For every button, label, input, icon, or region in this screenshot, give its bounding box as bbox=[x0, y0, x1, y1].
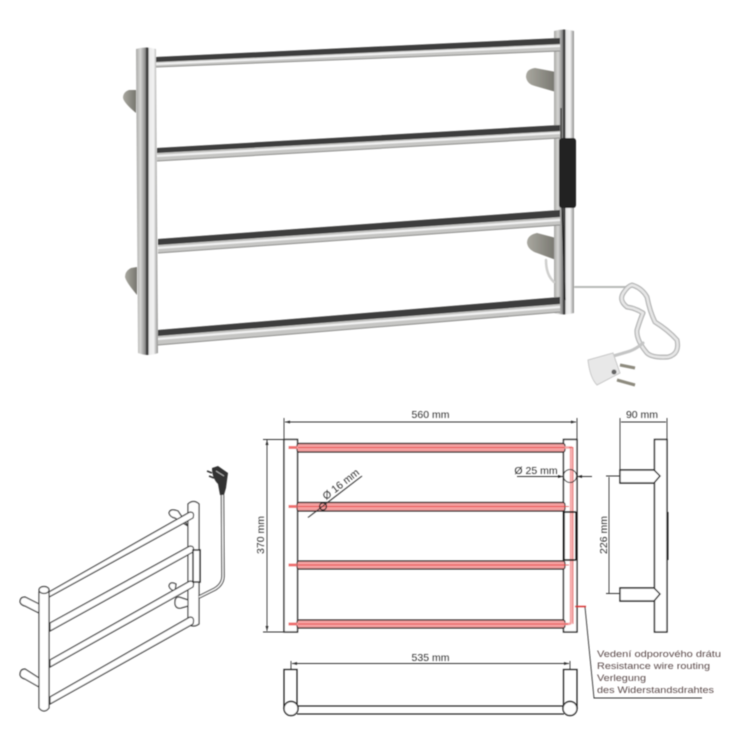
right post bbox=[188, 502, 199, 626]
dimension: 560 mm: 560 mm bbox=[412, 409, 450, 421]
rails bbox=[49, 512, 194, 704]
front view drawing bbox=[255, 409, 721, 698]
dimension: 370 mm: 370 mm bbox=[255, 516, 267, 554]
dimension: 90 mm bbox=[620, 409, 667, 470]
right post bbox=[554, 30, 574, 314]
bracket outlines bbox=[284, 670, 577, 716]
plug bbox=[207, 466, 228, 495]
isometric line drawing bbox=[20, 466, 228, 711]
left post bbox=[136, 48, 158, 355]
plug bbox=[588, 353, 635, 385]
heating rails bbox=[297, 444, 565, 628]
control box bbox=[559, 138, 576, 208]
dimension: 560 mm bbox=[284, 409, 577, 440]
control box bbox=[193, 550, 200, 582]
dimension: 90 mm: 90 mm bbox=[626, 409, 658, 421]
callout text: Vedení odporového drátu bbox=[597, 649, 721, 660]
dimension: 535 mm: 535 mm bbox=[412, 652, 450, 664]
cable bbox=[199, 495, 223, 597]
resistance wire bbox=[288, 448, 573, 624]
dimension: 16 mm diameter: Ø 16 mm bbox=[320, 466, 362, 503]
rails bbox=[156, 38, 560, 345]
callout text: Verlegung bbox=[597, 673, 646, 684]
power cable bbox=[546, 260, 678, 357]
top view drawing bbox=[284, 652, 577, 716]
dimension: 535 mm bbox=[291, 652, 570, 669]
callout text: des Widerstandsdrahtes bbox=[597, 685, 714, 696]
brackets bbox=[620, 470, 660, 601]
dimension: 25 mm diameter bbox=[514, 465, 592, 482]
dimension: 16 mm diameter bbox=[308, 466, 362, 518]
product photo: towel rail bbox=[123, 30, 678, 385]
wall pegs bbox=[20, 510, 188, 687]
wire marker bbox=[575, 606, 586, 608]
dimension: 25 mm diameter: Ø 25 mm bbox=[514, 465, 558, 477]
callout text: Resistance wire routing bbox=[597, 661, 710, 672]
wall pegs bbox=[123, 68, 556, 295]
control box outline bbox=[564, 512, 576, 560]
callout text bbox=[597, 649, 721, 696]
dimension: 226 mm bbox=[598, 476, 620, 594]
posts bbox=[284, 440, 577, 632]
dimension: 370 mm bbox=[255, 440, 290, 632]
leader line bbox=[585, 607, 702, 698]
dimension: 226 mm: 226 mm bbox=[598, 516, 610, 554]
left post bbox=[39, 586, 49, 711]
side view drawing bbox=[598, 409, 668, 632]
post bbox=[654, 440, 668, 632]
